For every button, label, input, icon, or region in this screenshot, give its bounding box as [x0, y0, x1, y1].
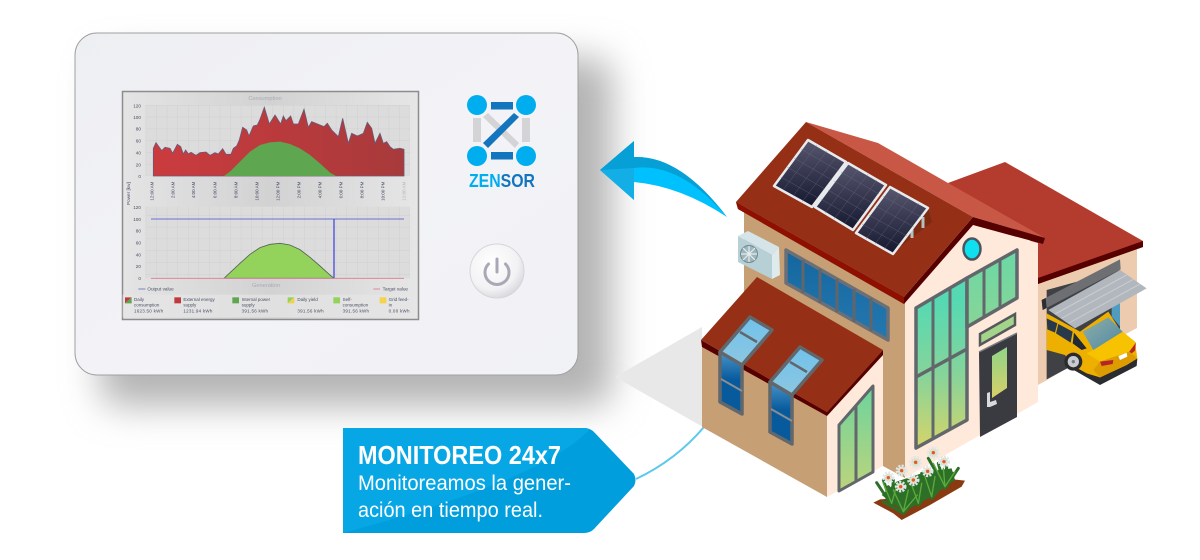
upper blue window strip: [786, 250, 888, 340]
chart: consumption area chart: 60: [136, 139, 141, 144]
lean-to tan wall: [702, 345, 827, 497]
callout: Monitoreo 24x7: [343, 428, 636, 533]
chart: generation area chart: 80: [136, 229, 141, 234]
legend: in: [389, 303, 393, 308]
door: [979, 314, 1017, 437]
legend: Daily: [134, 297, 145, 302]
icon: power button: [470, 244, 524, 298]
round gable window: [964, 238, 980, 260]
chart: consumption area chart: 12:00 AM: [402, 181, 407, 201]
chart: consumption area chart: 100: [133, 115, 141, 120]
chart: consumption area chart: 6:00 PM: [338, 181, 343, 198]
arrow: data flowing from house to monitor: [600, 141, 727, 217]
legend: 391.56 kWh: [297, 309, 324, 314]
legend: consumption: [343, 303, 369, 308]
chart: consumption area chart: 2:00 AM: [170, 181, 175, 198]
legend: 391.56 kWh: [242, 309, 269, 314]
car: [1047, 312, 1137, 377]
lean-to side window: [839, 386, 873, 491]
chart: generation area chart: Output value: [147, 287, 174, 292]
solar panels: [774, 140, 932, 254]
chart: consumption area chart: 12:00 AM: [149, 181, 154, 201]
chart: generation area chart: Generation: [252, 283, 280, 289]
callout: Monitoreo 24x7: MONITOREO 24x7: [358, 440, 561, 470]
garage roof: [948, 162, 1143, 284]
chart: generation area chart: Target value: [383, 287, 408, 292]
main tan wall: [744, 208, 905, 478]
legend: supply: [183, 303, 197, 308]
garage wall: [1038, 248, 1137, 385]
connector line from callout to house: [636, 427, 704, 479]
dormer window right: [770, 347, 822, 444]
legend: Self-: [343, 297, 352, 302]
legend: [123, 295, 416, 317]
callout: Monitoreo 24x7: Monitoreamos la gener-: [358, 472, 571, 495]
chart: generation area chart: 120: [133, 205, 141, 210]
legend: 1231.94 kWh: [183, 309, 213, 314]
chart: generation area chart: 0: [138, 276, 141, 281]
legend: supply: [242, 303, 255, 308]
chart: consumption area chart: 10:00 PM: [380, 181, 385, 201]
gable pink wall: [905, 225, 1038, 478]
chart: consumption area chart: Consumption: [248, 96, 282, 102]
legend: 0.00 kWh: [389, 309, 410, 314]
chart: generation area chart: 100: [133, 217, 141, 222]
panel: touchscreen: [122, 92, 418, 320]
device drop shadow: [100, 58, 612, 406]
chart: consumption area chart: 0: [138, 174, 141, 179]
chart: consumption area chart: 8:00 AM: [234, 181, 239, 198]
legend: Internal power: [242, 297, 271, 302]
main roof: [736, 122, 1045, 304]
legend: 391.56 kWh: [343, 309, 370, 314]
large gable window: [916, 250, 1017, 448]
legend: Grid feed-: [389, 297, 409, 302]
ground shadow of house: [615, 327, 703, 427]
chart: consumption area chart: 2:00 PM: [297, 181, 302, 198]
chart: consumption area chart: 40: [136, 150, 141, 155]
air conditioner unit: [738, 231, 780, 279]
logo: Zensor: [467, 95, 536, 191]
illustration: house: [701, 122, 1147, 520]
flower bed: [873, 448, 965, 520]
legend: 1623.50 kWh: [134, 309, 164, 314]
legend: consumption: [134, 303, 160, 308]
awning: [1042, 259, 1147, 328]
chart: consumption area chart: 120: [133, 103, 141, 108]
chart: generation area chart: 40: [136, 252, 141, 257]
chart: generation area chart: 60: [136, 241, 141, 246]
panel: wall monitor device: [75, 33, 578, 375]
chart: consumption area chart: 80: [136, 127, 141, 132]
chart: generation area chart: [133, 205, 410, 292]
chart: consumption area chart: 4:00 PM: [318, 181, 323, 198]
chart: consumption area chart: 12:00 PM: [275, 181, 280, 201]
legend: Daily yield: [297, 297, 318, 302]
logo: Zensor: ZENSOR: [469, 171, 535, 191]
lean-to pink wall: [827, 352, 883, 497]
lean-to roof: [701, 277, 883, 416]
gable roof slope: [806, 122, 1045, 238]
chart: consumption area chart: 10:00 AM: [254, 181, 259, 201]
garage opening and car: [1047, 270, 1137, 385]
chart: consumption area chart: Power [kw]: [126, 182, 131, 205]
chart: consumption area chart: 20: [136, 162, 141, 167]
legend: External energy: [183, 297, 215, 302]
chart: consumption area chart: [126, 96, 410, 205]
chart: consumption area chart: 6:00 AM: [213, 181, 218, 198]
chart: generation area chart: 20: [136, 264, 141, 269]
dormer window left: [720, 317, 772, 414]
chart: consumption area chart: 8:00 PM: [359, 181, 364, 198]
callout: Monitoreo 24x7: ación en tiempo real.: [358, 499, 543, 522]
chart: consumption area chart: 4:00 AM: [191, 181, 196, 198]
